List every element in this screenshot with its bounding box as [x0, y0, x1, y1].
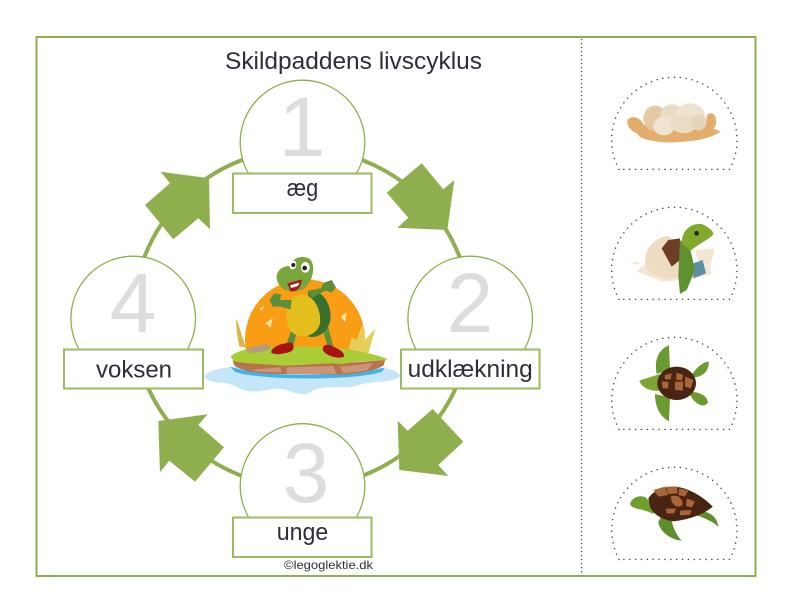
stage 3: young: [233, 424, 372, 557]
cut-out: adult turtle: [612, 467, 737, 559]
arrow: adult to egg: [145, 172, 210, 239]
stage 2: hatching: 2: [447, 256, 493, 350]
stage 3: young: unge: [277, 519, 328, 546]
cut-out: young turtle: [612, 337, 737, 429]
cycle ring: [133, 149, 471, 487]
arrow: young to adult: [158, 414, 224, 482]
stage 1: egg: æg: [287, 175, 318, 202]
dotted divider: [580, 39, 582, 575]
stage 2: hatching: [401, 256, 540, 388]
dome outline: [612, 77, 737, 169]
cut-out: eggs: [612, 77, 737, 169]
stage 1: egg: 1: [279, 80, 325, 174]
cut-out: hatching turtle: [612, 207, 737, 299]
stage 4: adult: voksen: [96, 356, 172, 384]
stage 4: adult: [64, 256, 203, 388]
stage 4: adult: 4: [110, 256, 156, 350]
dome outline: [612, 337, 737, 429]
stage 3: young: 3: [283, 426, 329, 520]
stage 2: hatching: udklækning: [408, 356, 533, 383]
stage 1: egg: [233, 80, 372, 213]
title: Skildpaddens livscyklus: [225, 48, 482, 75]
arrow: egg to hatching: [387, 163, 454, 230]
arrow: hatching to young: [398, 409, 463, 476]
page frame: [36, 37, 756, 576]
dome outline: [612, 467, 737, 559]
copyright: ©legoglektie.dk: [284, 558, 374, 572]
central cartoon turtle on island: [204, 257, 400, 394]
dome outline: [612, 207, 737, 299]
